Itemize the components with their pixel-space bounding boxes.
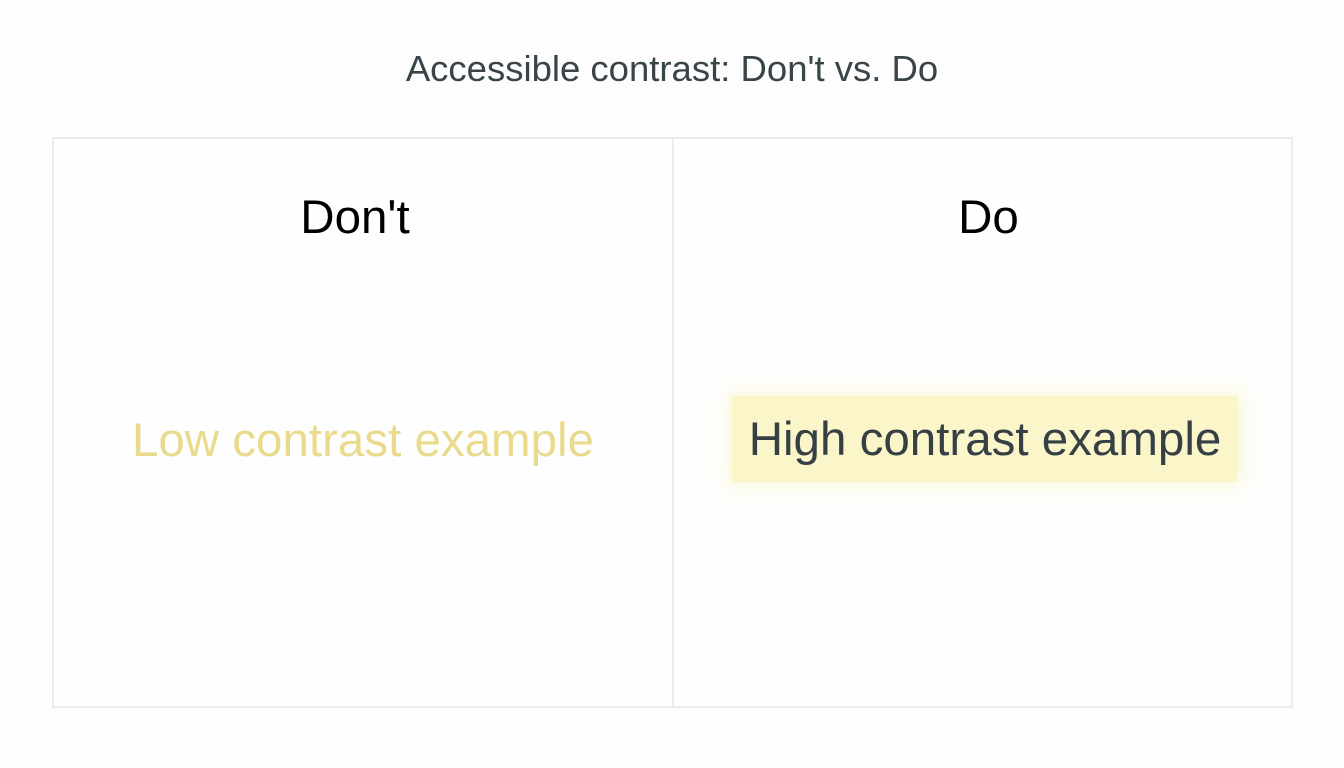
heading: don't: Don't [300,191,410,244]
panel: don't [52,137,674,708]
panel: do [672,137,1293,708]
title: Accessible contrast: Don't vs. Do [406,48,938,89]
highlight box with high contrast example [732,396,1238,482]
text: high contrast example: High contrast example [749,413,1221,466]
heading: do: Do [958,191,1019,244]
text: low contrast example: Low contrast example [132,414,594,467]
